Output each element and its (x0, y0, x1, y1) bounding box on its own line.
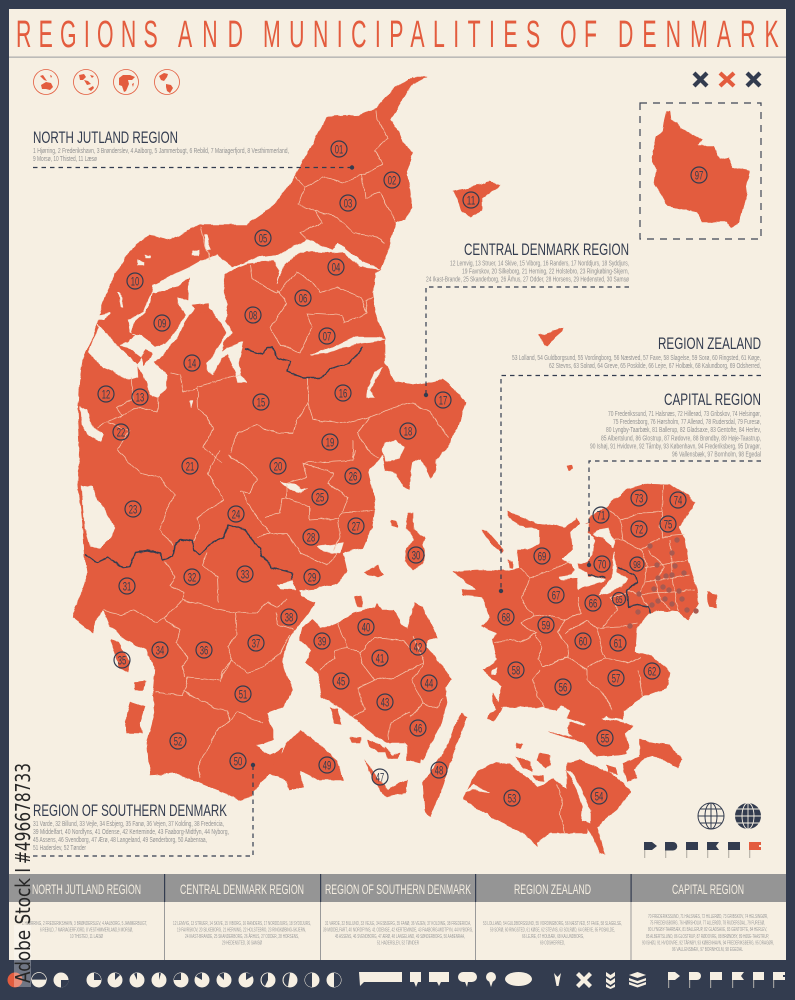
text block: Capital Region (587, 390, 761, 567)
numbered markers: Capital: 97 (695, 168, 703, 182)
numbered markers: Capital: 72 (635, 522, 643, 536)
fjords and lakes (80, 235, 640, 823)
numbered markers: Southern Denmark: 44 (425, 676, 433, 690)
stock watermark text: #496678733 (11, 763, 35, 864)
numbered markers: Southern Denmark: 43 (381, 695, 389, 709)
numbered markers: Southern Denmark: 51 (239, 687, 247, 701)
table column: Capital: 96 VALLENSBÆK, 97 BORNHOLM, 98 EGEDAL (672, 947, 743, 953)
text block: Central Denmark Region (424, 240, 629, 397)
numbered markers: Zealand: 66 (589, 596, 597, 610)
numbered markers: Zealand: 57 (612, 671, 620, 685)
numbered markers: Zealand: 62 (648, 664, 656, 678)
island: Anholt (539, 328, 563, 345)
numbered markers: Zealand (498, 548, 660, 806)
table column: Capital (642, 881, 774, 953)
table column: Central Denmark (173, 881, 311, 946)
island: Langeland (423, 712, 467, 817)
islands: Lolland and Falster (463, 760, 630, 855)
island: Funen (300, 603, 452, 760)
numbered markers: Southern Denmark: 50 (234, 754, 242, 768)
numbered markers: Capital: 98 (633, 559, 641, 571)
table column: Southern Denmark: REGION OF SOUTHERN DENMARK (325, 881, 471, 897)
numbered markers: Zealand: 59 (542, 618, 550, 632)
icon strip: cream flags (668, 972, 785, 988)
table column: Southern Denmark: 31 VARDE, 32 BILLUND, 33 VEJLE, 34 ESBJERG, 35 FANØ, 36 VEJEN, 37 KOLDING, 38 FREDERICIA, (325, 921, 471, 927)
numbered markers: North Jutland: 04 (332, 260, 340, 274)
text block: Central Denmark Region: 12 Lemvig, 13 Struer, 14 Skive, 15 Viborg, 16 Randers, 17 Norddjurs, 18 Syddjurs, (450, 258, 629, 268)
table column: Zealand: 66 LEJRE, 67 HOLBÆK, 68 KALUNDBORG, (522, 934, 584, 940)
text block: North Jutland Region: 1 Hjørring, 2 Frederikshavn, 3 Brønderslev, 4 Aalborg, 5 Jammerbugt, 6 Rebild, 7 Mariagerfjord, 8 Vesthimmerland, (33, 146, 289, 155)
numbered markers: Capital: 71 (597, 508, 605, 522)
map of Denmark (72, 77, 749, 855)
numbered markers: Southern Denmark: 34 (156, 643, 164, 657)
text block: North Jutland Region: 9 Morsø, 10 Thisted, 11 Læsø (33, 154, 97, 163)
icon strip: pie charts (8, 972, 342, 988)
numbered markers: Central Denmark: 12 (102, 387, 110, 401)
island: Laeso (453, 182, 500, 218)
table header band (9, 874, 786, 902)
numbered markers: Zealand: 55 (601, 731, 609, 745)
numbered markers: North Jutland: 08 (249, 308, 257, 322)
text block: North Jutland Region (33, 128, 354, 170)
numbered markers: Southern Denmark: 31 (123, 579, 131, 593)
numbered markers: Southern Denmark: 38 (285, 610, 293, 624)
text block: Region of Southern Denmark: 31 Varde, 32 Billund, 33 Vejle, 34 Esbjerg, 35 Fanø, 36 Vejen, 37 Kolding, 38 Fredericia, (33, 819, 224, 828)
table column: Central Denmark: 24 IKAST-BRANDE, 25 SKANDERBORG, 26 ÅRHUS, 27 ODDER, 28 HORSENS, (185, 933, 299, 940)
numbered markers: Southern Denmark: 37 (252, 636, 260, 650)
numbered markers: Central Denmark: 28 (307, 530, 315, 544)
numbered markers: Southern Denmark: 33 (241, 567, 249, 581)
text block: Central Denmark Region: CENTRAL DENMARK REGION (464, 240, 629, 259)
numbered markers: Central Denmark: 21 (186, 459, 194, 473)
numbered markers: Capital: 70 (598, 557, 606, 571)
numbered markers: North Jutland: 05 (259, 231, 267, 245)
icon strip: arrows and chevrons (554, 972, 646, 989)
land masses (72, 77, 749, 855)
island: South Zealand (548, 718, 633, 757)
numbered markers: Southern Denmark: 46 (414, 721, 422, 735)
numbered markers: North Jutland: 03 (344, 196, 352, 210)
table column: North Jutland: 10 THISTED, 11 LÆSØ (70, 934, 103, 940)
table column: Central Denmark: 19 FAVRSKOV, 20 SILKEBORG, 21 HERNING, 22 HOLSTEBRO, 23 RINGKØBING-SKJERN, (177, 928, 306, 934)
text block: Region of Southern Denmark: 45 Assens, 46 Svendborg, 47 Ærø, 48 Langeland, 49 Sønderborg, 50 Aabenraa, (33, 835, 207, 844)
numbered markers: Central Denmark: 17 (439, 393, 447, 407)
numbered markers: Central Denmark: 13 (136, 390, 144, 404)
island: Samso (405, 513, 425, 570)
dashed frame: Bornholm inset (640, 103, 761, 239)
text block: Region of Southern Denmark: REGION OF SOUTHERN DENMARK (33, 801, 227, 820)
icon row: three crosses (694, 73, 760, 86)
numbered markers: North Jutland: 11 (467, 193, 475, 207)
numbered markers: Central Denmark (98, 355, 451, 585)
numbered markers: Central Denmark: 25 (316, 490, 324, 504)
text block: Region of Southern Denmark: 39 Middelfart, 40 Nordfyns, 41 Odense, 42 Kerteminde, 43 Faaborg-Midtfyn, 44 Nyborg, (33, 827, 229, 836)
numbered markers: North Jutland (127, 141, 479, 344)
numbered markers: Zealand: 67 (552, 588, 560, 602)
numbered markers: North Jutland: 01 (335, 142, 343, 156)
table column: North Jutland (22, 881, 147, 940)
land: Mors island and Fur (132, 278, 208, 365)
stock watermark text (11, 763, 35, 987)
numbered markers: Zealand: 56 (559, 680, 567, 694)
numbered markers: Southern Denmark: 47 (376, 770, 384, 784)
numbered markers: Capital (593, 167, 707, 572)
numbered markers: Central Denmark: 30 (412, 548, 420, 562)
numbered markers: Central Denmark: 24 (232, 507, 240, 521)
table column: Central Denmark: 29 HEDENSTED, 30 SAMSØ (222, 940, 262, 946)
table column: North Jutland: 1 HJØRRING, 2 FREDERIKSHAVN, 3 BRØNDERSLEV, 4 AALBORG, 5 JAMMERBUGT, (22, 921, 147, 927)
numbered markers: Southern Denmark: 48 (435, 763, 443, 777)
numbered markers: Central Denmark: 29 (308, 570, 316, 584)
table column: Zealand: REGION ZEALAND (514, 881, 591, 897)
title: REGIONS (16, 12, 158, 56)
icon row: world globes (34, 70, 180, 94)
table column: Southern Denmark: 39 MIDDELFART, 40 NORDFYNS, 41 ODENSE, 42 KERTEMINDE, 43 FAABORG-MIDTFYN, 44 NYBORG, (323, 928, 473, 934)
table column: Southern Denmark: 51 HADERSLEV, 52 TØNDER (377, 940, 419, 946)
numbered markers: Southern Denmark: 49 (323, 758, 331, 772)
numbered markers: Central Denmark: 18 (404, 424, 412, 438)
numbered markers: Southern Denmark: 36 (200, 643, 208, 657)
numbered markers: Zealand: 58 (512, 663, 520, 677)
island: Als (267, 730, 343, 790)
icon strip: speech bubbles (359, 972, 532, 987)
numbered markers: Southern Denmark: 40 (362, 620, 370, 634)
municipality borders (97, 110, 695, 833)
numbered markers: Zealand: 61 (614, 636, 622, 650)
island: Bornholm (651, 111, 749, 228)
table column: Zealand: 53 LOLLAND, 54 GULDBORGSUND, 55 VORDINGBORG, 56 NÆSTVED, 57 FAXE, 58 SLAGELSE, (483, 921, 622, 927)
numbered markers: Southern Denmark: 41 (376, 651, 384, 665)
numbered markers: North Jutland: 09 (158, 316, 166, 330)
text block: North Jutland Region: NORTH JUTLAND REGION (33, 128, 178, 147)
numbered markers: Zealand: 53 (508, 791, 516, 805)
numbered markers: Capital: 74 (674, 493, 682, 507)
numbered markers: Capital: 73 (635, 491, 643, 505)
icons: row of flags (644, 842, 761, 858)
numbered markers: Southern Denmark: 35 (118, 653, 126, 667)
numbered markers: North Jutland: 06 (299, 291, 307, 305)
table column: Capital: CAPITAL REGION (672, 881, 744, 897)
icons: line globe and solid globe (698, 803, 761, 829)
table column: Zealand: 69 ODSHERRED, (540, 940, 565, 946)
table column: Central Denmark: CENTRAL DENMARK REGION (180, 881, 304, 897)
numbered markers: Central Denmark: 19 (326, 435, 334, 449)
regional boundaries (86, 347, 651, 613)
numbered markers: Southern Denmark (114, 566, 447, 785)
table column: Southern Denmark (323, 881, 473, 946)
numbered markers: Central Denmark: 16 (339, 386, 347, 400)
island: Fano (110, 640, 130, 672)
text block: Region of Southern Denmark (33, 763, 255, 856)
island: Mon (623, 740, 682, 782)
table column: Southern Denmark: 45 ASSENS, 46 SVENDBORG, 47 ÆRØ, 48 LANGELAND, 49 SØNDERBORG, 50 AABENRAA, (335, 934, 465, 940)
table column: North Jutland: 6 REBILD, 7 MARIAGERFJORD, 8 VESTHIMMERLAND,9 MORSØ, (40, 928, 133, 934)
title: MUNICIPALITIES (263, 12, 540, 56)
title (16, 12, 779, 56)
numbered markers: Zealand: 69 (538, 549, 546, 563)
numbered markers: Southern Denmark: 45 (337, 674, 345, 688)
table column: North Jutland: NORTH JUTLAND REGION (32, 881, 141, 897)
numbered markers: North Jutland: 10 (131, 274, 139, 288)
title: DENMARK (618, 12, 779, 56)
text block: Region Zealand (499, 334, 761, 593)
numbered markers: Central Denmark: 26 (349, 469, 357, 483)
numbered markers: North Jutland: 02 (388, 173, 396, 187)
numbered markers: Southern Denmark: 52 (174, 734, 182, 748)
numbered markers: North Jutland: 07 (323, 329, 331, 343)
numbered markers: Central Denmark: 14 (188, 356, 196, 370)
island: Zealand (453, 484, 698, 725)
numbered markers: Zealand: 65 (616, 595, 623, 606)
title: OF (560, 12, 597, 56)
numbered markers: Central Denmark: 27 (352, 519, 360, 533)
numbered markers: Central Denmark: 15 (257, 395, 265, 409)
numbered markers: Zealand: 68 (502, 610, 510, 624)
numbered markers: Southern Denmark: 32 (188, 570, 196, 584)
numbered markers: Southern Denmark: 42 (414, 640, 422, 654)
numbered markers: Central Denmark: 22 (117, 425, 125, 439)
stock watermark text: Adobe Stock (11, 878, 35, 983)
text block: Central Denmark Region: 24 Ikast-Brande, 25 Skanderborg, 26 Århus, 27 Odder, 28 Horsens, 29 Hedensted, 30 Samsø (426, 274, 629, 284)
numbered markers: Zealand: 54 (595, 789, 603, 803)
text block: Region of Southern Denmark: 51 Haderslev, 52 Tønder (33, 843, 86, 852)
table column: Zealand: 59 SORØ, 60 RINGSTED, 61 KØGE, 62 STEVNS, 63 SOLRØD, 64 GREVE, 65 POSKILDE, (490, 928, 615, 934)
numbered markers: Southern Denmark: 39 (318, 634, 326, 648)
table column: Zealand (483, 881, 622, 946)
numbered markers: Zealand: 60 (579, 634, 587, 648)
text block: Central Denmark Region: 19 Favrskov, 20 Silkeborg, 21 Herning, 22 Holstebro, 23 Ringkøbing-Skjern, (462, 266, 629, 276)
numbered markers: Central Denmark: 20 (274, 459, 282, 473)
coastline and municipal boundaries (72, 77, 749, 855)
title: AND (178, 12, 243, 56)
table column: Central Denmark: 12 LEMVIG, 13 STRUER, 14 SKIVE, 15 VIBORG, 16 RANDERS, 17 NORDDJURS, 18 SYDDJURS, (173, 921, 311, 927)
island: Aero (365, 760, 407, 797)
table (9, 874, 786, 960)
numbered markers: Capital: 75 (664, 517, 672, 531)
small capital municipality dots (627, 537, 699, 629)
numbered markers: Central Denmark: 23 (129, 502, 137, 516)
